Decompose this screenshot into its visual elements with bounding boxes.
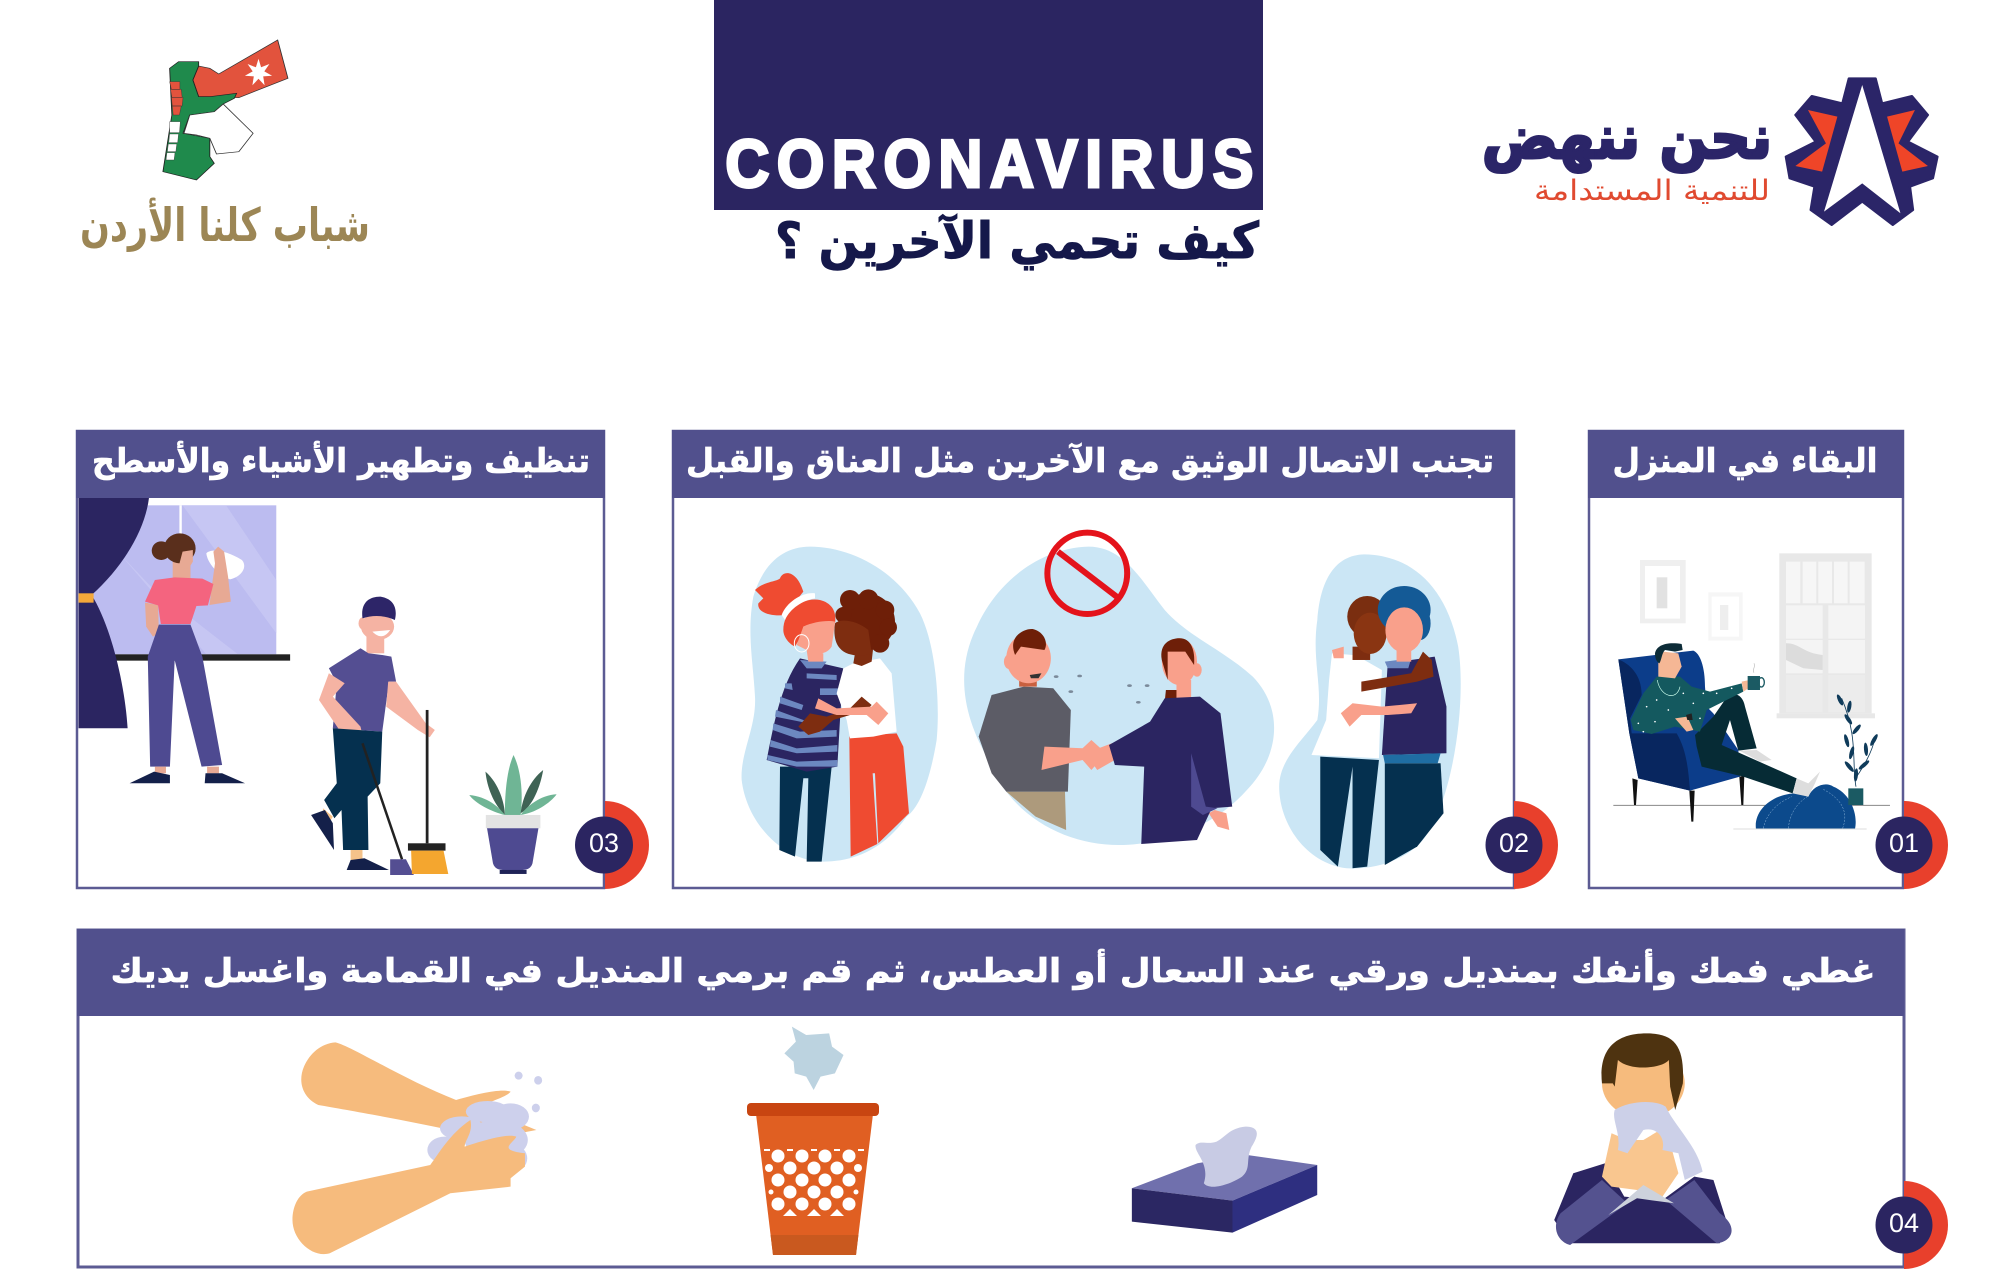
icon: tissue box: [1132, 1127, 1317, 1233]
figure: woman: [130, 533, 245, 783]
panel header: [77, 929, 1904, 1016]
icon: pouf: [1733, 784, 1867, 829]
icon: waste bin: [747, 1103, 879, 1255]
logo: youth all Jordan: [80, 40, 370, 252]
logo: we rise: [1482, 78, 1937, 225]
figure: man sweeping: [311, 597, 448, 875]
icon: potted plant: [469, 755, 557, 874]
icon: washing hands: [292, 1042, 542, 1254]
heading: تجنب الاتصال الوثيق مع الآخرين مثل العناق والقبل: [686, 441, 1494, 481]
icon: window: [92, 505, 290, 661]
icon: armchair: [1618, 651, 1744, 822]
subtitle: كيف تحمي الآخرين ؟: [775, 212, 1260, 271]
badge: 04: 04: [1889, 1208, 1919, 1238]
heading: تنظيف وتطهير الأشياء والأسطح: [92, 440, 590, 481]
figure: man with mug: [1631, 643, 1820, 797]
panel header: [76, 430, 605, 498]
scene: hug and kiss: [742, 547, 938, 862]
heading: غطي فمك وأنفك بمنديل ورقي عند السعال أو العطس، ثم قم برمي المنديل في القمامة واغسل يديك: [110, 949, 1876, 991]
badge: 01: [1876, 801, 1948, 889]
badge: 02: 02: [1499, 828, 1529, 858]
logo text: شباب كلنا الأردن: [80, 197, 370, 252]
icon: Jordan map of hands: [163, 40, 288, 180]
panel header: [672, 430, 1515, 498]
panel: avoid close contact: [672, 430, 1558, 889]
illustration: prohibition and embrace scenes: [964, 533, 1461, 868]
badge: 02: [1486, 801, 1558, 889]
floor lines: [1613, 804, 1890, 807]
badge: 04: [1876, 1181, 1948, 1269]
illustration: man relaxing in armchair: [1613, 643, 1890, 829]
illustrations: hands and tissue: [292, 1027, 844, 1254]
panel: clean and disinfect: [76, 430, 649, 889]
icon: prohibition sign: [1047, 533, 1127, 614]
wall frames: [1640, 560, 1743, 641]
logo text: main: نحن ننهض: [1482, 103, 1772, 173]
panel: cover mouth and nose: [77, 929, 1948, 1269]
scene: embrace: [1279, 554, 1461, 868]
icon: plant: [1836, 694, 1879, 805]
illustrations: tissue box and man: [1132, 1033, 1732, 1245]
icon: window: [1777, 553, 1875, 718]
title: coronavirus: CORONAVIRUS: [725, 125, 1261, 202]
badge: 03: [575, 801, 649, 889]
icon: gear star: [1786, 78, 1937, 225]
figure: man sneezing into tissue: [1554, 1033, 1732, 1245]
heading: البقاء في المنزل: [1612, 441, 1878, 481]
icon: tissue falling: [784, 1027, 844, 1090]
illustration: cleaning window and sweeping: [79, 498, 557, 875]
badge: 01: 01: [1889, 828, 1919, 858]
illustration: room background: [1640, 553, 1875, 718]
icon: curtain: [79, 498, 149, 728]
badge: 03: 03: [589, 828, 619, 858]
logo text: sub: للتنمية المستدامة: [1534, 174, 1770, 207]
panel: stay home: [1588, 430, 1948, 889]
icon: star: [245, 59, 272, 85]
panel header: [1588, 430, 1904, 498]
scene: handshake: [964, 547, 1274, 845]
title banner: [714, 0, 1263, 210]
